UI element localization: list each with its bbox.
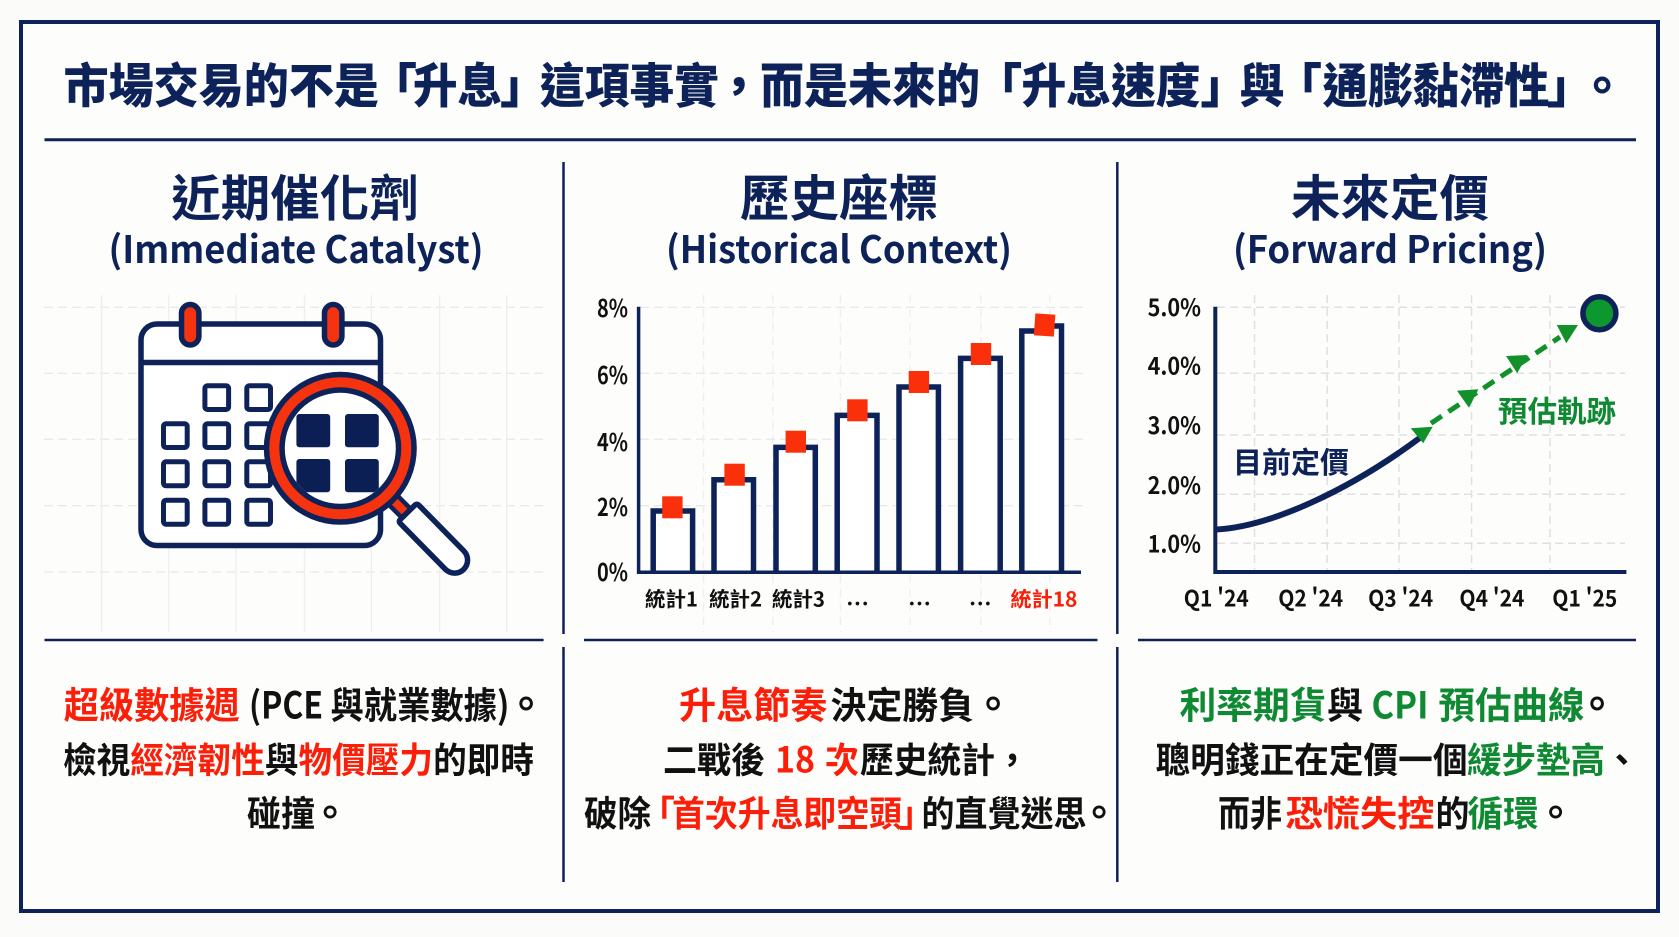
- heading: forward pricing: [1233, 160, 1547, 274]
- text block: historical context: 18: [775, 732, 815, 784]
- y axis labels: 8%: [597, 289, 628, 324]
- y axis labels: 2%: [597, 488, 628, 523]
- text block: immediate catalyst: 。: [310, 781, 350, 839]
- axes: [1215, 307, 1626, 572]
- text block: immediate catalyst: 。: [505, 672, 547, 733]
- label: estimated path: 預估軌跡: [1498, 389, 1616, 431]
- x axis labels: 統計1: [645, 582, 698, 612]
- text block: forward pricing: 。: [1536, 781, 1576, 839]
- text block: historical context: 「: [640, 786, 675, 837]
- text block: forward pricing: CPI: [1372, 676, 1428, 730]
- panel: immediate catalyst: [44, 160, 547, 839]
- y axis labels: [1148, 289, 1201, 560]
- heading: forward pricing: 未來定價: [1291, 160, 1489, 231]
- heading: forward pricing: (Forward Pricing): [1233, 219, 1547, 274]
- title: 。: [1577, 47, 1627, 119]
- text block: forward pricing: 預估曲線: [1438, 676, 1584, 730]
- title: 升息速度: [1022, 48, 1200, 117]
- panel: historical context: [584, 160, 1119, 839]
- heading: immediate catalyst: [108, 160, 484, 274]
- text block: immediate catalyst: (PCE: [249, 676, 323, 730]
- text block: immediate catalyst: 與就業數據): [330, 676, 510, 730]
- title: 通膨黏滯性: [1322, 48, 1550, 117]
- title: 「: [975, 48, 1022, 117]
- text block: immediate catalyst: 檢視經濟韌性與物價壓力的即時: [63, 732, 534, 784]
- heading: historical context: (Historical Context): [666, 219, 1012, 274]
- x axis labels: 統計18: [1010, 582, 1078, 612]
- heading: historical context: 歷史座標: [740, 160, 938, 231]
- y axis labels: 5.0%: [1148, 289, 1201, 323]
- x axis labels: ...: [969, 581, 992, 611]
- title: 與: [1240, 48, 1284, 117]
- y axis labels: [597, 289, 628, 588]
- title: [64, 47, 1627, 119]
- title: 升息: [413, 48, 502, 117]
- y axis labels: 1.0%: [1148, 526, 1201, 560]
- red markers: [662, 313, 1055, 518]
- x axis labels: [645, 581, 1078, 612]
- y axis labels: 3.0%: [1148, 407, 1201, 441]
- text block: immediate catalyst: 超級數據週: [64, 676, 240, 730]
- text block: historical context: 的直覺迷思: [922, 786, 1086, 837]
- magnifier lens: [264, 372, 417, 525]
- text block: forward pricing: 緩步墊高: [1467, 732, 1605, 784]
- text block: immediate catalyst: 碰撞: [247, 786, 315, 837]
- forecast dashed path: [1431, 337, 1560, 423]
- text block: forward pricing: 聰明錢正在定價一個: [1156, 732, 1468, 784]
- text block: forward pricing: 而非: [1218, 786, 1282, 837]
- x axis labels: Q1 '24: [1184, 582, 1249, 614]
- text block: forward pricing: 。: [1576, 672, 1618, 733]
- text block: historical context: 。: [1079, 781, 1119, 839]
- text block: historical context: 」: [899, 786, 935, 837]
- text block: immediate catalyst: [63, 672, 547, 839]
- x axis labels: 統計3: [772, 582, 825, 612]
- text block: historical context: 二戰後: [663, 732, 765, 784]
- calendar body: [141, 324, 380, 546]
- panel: forward pricing: [1148, 160, 1640, 839]
- icon: calendar with magnifying glass: [141, 304, 473, 578]
- bars: [653, 326, 1062, 572]
- title: 市場交易的不是: [64, 48, 379, 117]
- calendar day cells: [164, 386, 270, 524]
- calendar rings: [182, 304, 342, 345]
- y axis labels: 0%: [597, 553, 628, 588]
- x axis labels: 統計2: [709, 582, 762, 612]
- text block: historical context: [584, 672, 1119, 839]
- endpoint marker: [1583, 297, 1616, 330]
- title: 這項事實: [540, 48, 719, 117]
- title: 而是未來的: [760, 48, 980, 117]
- text block: historical context: 次: [825, 732, 859, 784]
- y axis labels: 4.0%: [1148, 348, 1201, 382]
- text block: forward pricing: 利率期貨: [1180, 676, 1326, 730]
- text block: forward pricing: 循環: [1468, 786, 1538, 837]
- text block: historical context: ，: [994, 732, 1030, 784]
- text block: forward pricing: [1156, 672, 1640, 839]
- x axis labels: Q4 '24: [1459, 582, 1524, 614]
- y axis labels: 6%: [597, 356, 628, 391]
- title: 」: [1547, 48, 1594, 117]
- text block: historical context: 。: [972, 672, 1014, 733]
- forecast arrowheads: [1411, 325, 1578, 443]
- title: 「: [370, 48, 417, 117]
- label: current pricing: 目前定價: [1233, 440, 1349, 482]
- text block: forward pricing: 、: [1604, 732, 1640, 784]
- text block: historical context: 首次升息即空頭: [672, 786, 902, 837]
- heading: immediate catalyst: (Immediate Catalyst): [108, 219, 484, 274]
- magnifier handle: [392, 499, 473, 578]
- heading: historical context: [666, 160, 1012, 274]
- axes: [639, 307, 1081, 572]
- text block: forward pricing: 與: [1327, 676, 1363, 730]
- text block: forward pricing: 恐慌失控: [1286, 786, 1434, 837]
- title: 」: [1200, 48, 1248, 117]
- x axis labels: ...: [908, 581, 932, 611]
- bar chart: 18 historical statistics: [597, 289, 1083, 632]
- text block: historical context: 歷史統計: [860, 732, 995, 784]
- text block: forward pricing: 的: [1436, 786, 1470, 837]
- x axis labels: Q2 '24: [1278, 582, 1343, 614]
- title: 「: [1274, 48, 1322, 117]
- title: ，: [715, 48, 762, 117]
- x axis labels: Q3 '24: [1368, 582, 1433, 614]
- y axis labels: 2.0%: [1148, 467, 1201, 501]
- heading: immediate catalyst: 近期催化劑: [171, 160, 419, 231]
- x axis labels: Q1 '25: [1552, 582, 1617, 614]
- text block: historical context: 破除: [584, 786, 651, 837]
- x axis labels: [1184, 582, 1617, 614]
- y axis labels: 4%: [597, 423, 628, 458]
- title: 」: [500, 48, 548, 117]
- text block: historical context: 決定勝負: [830, 676, 974, 730]
- x axis labels: ...: [846, 581, 870, 611]
- current pricing curve: [1216, 437, 1421, 530]
- text block: historical context: 升息節奏: [679, 676, 828, 730]
- line chart: forward pricing path: [1148, 289, 1626, 614]
